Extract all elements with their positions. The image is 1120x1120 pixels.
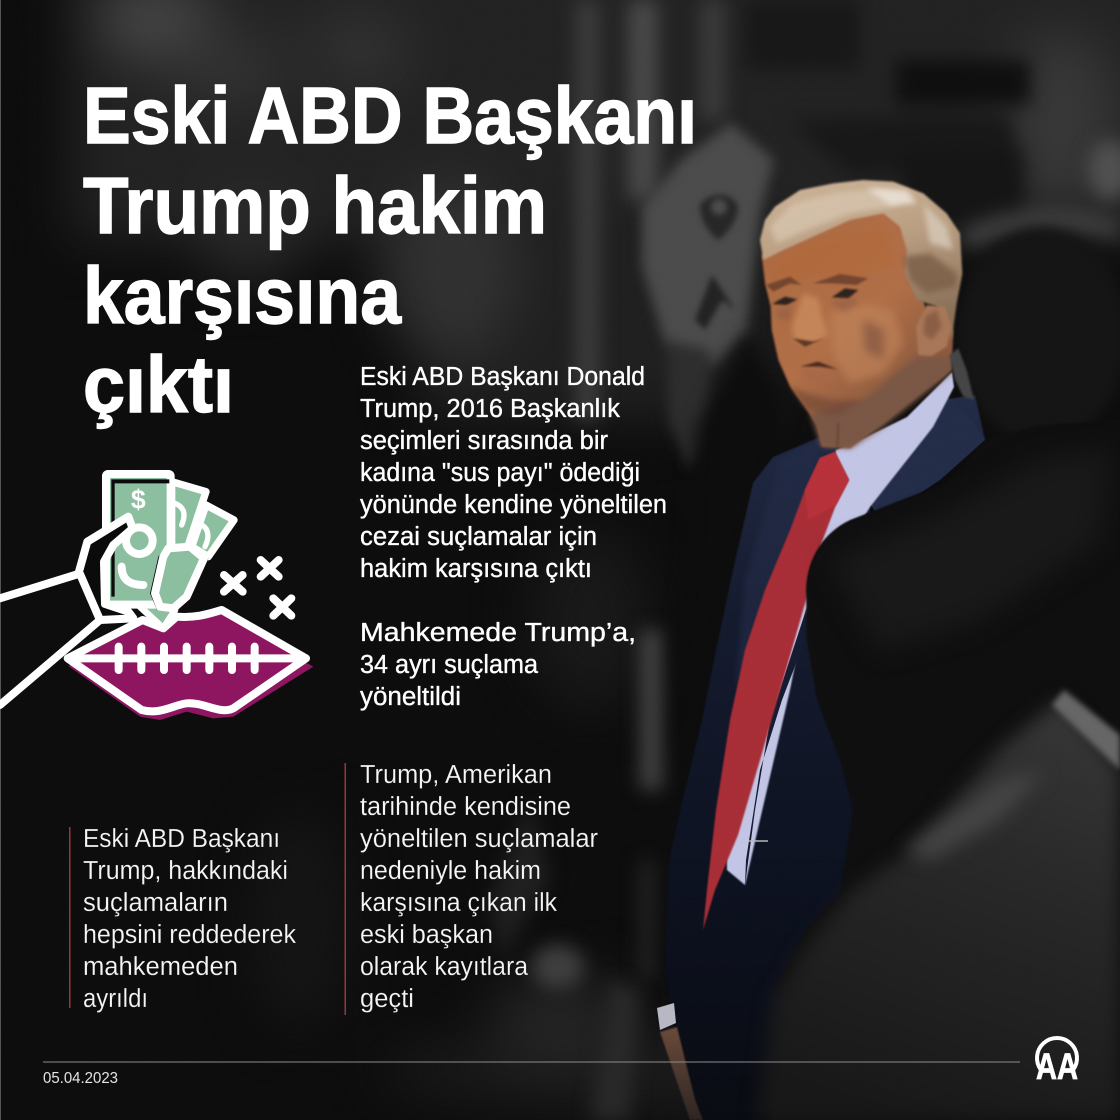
logo: AA: AA	[1036, 1046, 1078, 1087]
title: Trump hakim	[83, 161, 547, 250]
jacket	[665, 395, 985, 1120]
icon: hand with money and lips	[0, 474, 313, 720]
text block: left denial: hepsini reddederek	[83, 921, 296, 949]
foreground figure	[773, 420, 1120, 1000]
mouth	[800, 362, 837, 369]
text block: first former president: olarak kayıtlara	[360, 953, 529, 981]
text block: summary: hakim karşısına çıktı	[360, 555, 592, 583]
title: karşısına	[83, 251, 401, 340]
icon: hand with money and lips: $	[131, 484, 146, 514]
text block: charges: 34 ayrı suçlama	[360, 651, 539, 679]
foreground figure soft light	[830, 450, 1110, 650]
text block: left denial: ayrıldı	[83, 985, 148, 1013]
text block: summary: cezai suçlamalar için	[360, 523, 597, 551]
dark head right	[957, 227, 1120, 443]
bill details	[175, 503, 208, 547]
cuff and hand	[657, 1003, 676, 1030]
cheek highlights	[830, 303, 903, 383]
forehead tint	[770, 227, 897, 283]
text block: first former president: tarihinde kendisine	[360, 793, 571, 821]
text block: summary: Trump, 2016 Başkanlık	[360, 395, 620, 423]
text block: summary: seçimleri sırasında bir	[360, 427, 608, 455]
eye bag	[775, 298, 860, 320]
earpiece	[949, 348, 974, 400]
footer rule	[43, 1062, 1020, 1063]
title: Eski ABD Başkanı	[83, 71, 697, 160]
brows and eyes	[766, 277, 802, 292]
text block: first former president: nedeniyle hakim	[360, 857, 541, 885]
text block: left denial: suçlamaların	[83, 889, 228, 917]
back bills	[172, 482, 234, 557]
photo: Trump figure	[657, 180, 1120, 1120]
skin	[762, 210, 953, 448]
lower right person	[757, 698, 1120, 1120]
hair	[760, 180, 962, 340]
text block: first former president: Trump, Amerikan	[360, 761, 552, 789]
accent rule: right block	[344, 763, 346, 1015]
text block: summary: kadına "sus payı" ödediği	[360, 459, 640, 487]
shirt	[725, 372, 954, 885]
accent rule: left block	[69, 827, 70, 1008]
text block: left denial: Eski ABD Başkanı	[83, 825, 280, 853]
lips	[68, 617, 313, 720]
text block: charges	[360, 619, 636, 711]
text block: first former president: eski başkan	[360, 921, 493, 949]
hand	[0, 517, 208, 705]
neck shadow	[810, 357, 950, 448]
logo: AA	[1036, 1038, 1078, 1087]
main bill	[106, 474, 171, 605]
text block: summary: Eski ABD Başkanı Donald	[360, 363, 645, 391]
date: 05.04.2023	[43, 1070, 118, 1087]
text block: left denial	[83, 825, 296, 1013]
title: çıktı	[83, 340, 234, 429]
head group	[760, 180, 974, 448]
crosses	[224, 560, 291, 616]
text block: charges: Mahkemede Trump’a,	[360, 619, 636, 647]
text block: first former president	[360, 761, 598, 1013]
text block: first former president: yöneltilen suçlamalar	[360, 825, 598, 853]
text block: first former president: geçti	[360, 985, 414, 1013]
ear	[916, 305, 952, 356]
dark body left of face	[675, 330, 785, 760]
nose	[792, 293, 828, 343]
title	[83, 71, 697, 429]
lip stitches	[75, 647, 300, 670]
pocket square line	[748, 840, 768, 842]
text block: summary: yönünde kendine yöneltilen	[360, 491, 667, 519]
lower bill corner	[140, 603, 175, 628]
text block: first former president: karşısına çıkan ilk	[360, 889, 557, 917]
text block: summary	[360, 363, 667, 583]
text block: charges: yöneltildi	[360, 683, 461, 711]
text block: left denial: mahkemeden	[83, 953, 238, 981]
text block: left denial: Trump, hakkındaki	[83, 857, 288, 885]
tie	[703, 452, 849, 930]
